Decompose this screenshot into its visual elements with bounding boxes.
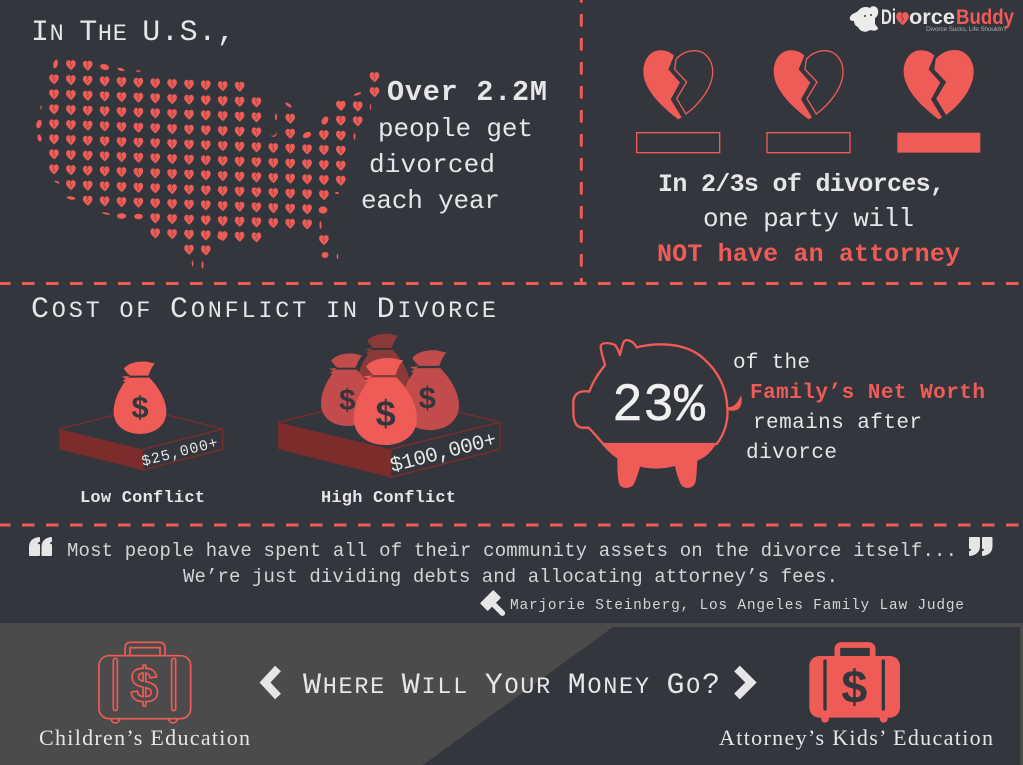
logo: DivorceBuddy [850, 6, 1014, 33]
label: children's education: Children’s Education [39, 725, 250, 750]
stat: 2.2M people divorced each year: Over 2.2M [387, 76, 547, 109]
icon: outlined suitcase [99, 642, 191, 723]
box 1: empty [637, 133, 720, 153]
logo: DivorceBuddy: Divorce Sucks, Life Shouldn't [926, 26, 1006, 33]
heading: Cost of Conflict in Divorce: COST OF CONFLICT IN DIVORCE [31, 293, 496, 327]
heart 3: fully filled [904, 50, 973, 119]
broken hearts and attorney boxes [637, 50, 980, 153]
stat: family's net worth [733, 352, 985, 465]
box 3: filled [897, 133, 980, 153]
quote text [67, 540, 957, 588]
icon: opening quote mark [30, 538, 51, 555]
stat: 2/3 of divorces no attorney [657, 170, 960, 269]
map of the U.S. made of broken hearts [35, 59, 379, 269]
stat: 2.2M people divorced each year [361, 76, 547, 216]
high conflict: four money bags on platform: $ [376, 393, 396, 434]
icon: filled suitcase [809, 645, 900, 723]
piggy bank 23 percent [573, 340, 742, 488]
high conflict: four money bags on platform [278, 334, 500, 479]
quote text: Most people have spent all of their community assets on the divorce itself... [67, 540, 957, 562]
arrow: left chevron [265, 668, 278, 696]
stat: 2.2M people divorced each year: each year [361, 186, 500, 216]
stat: 2/3 of divorces no attorney: one party will [703, 204, 914, 234]
label: attorney's kids' education: Attorney’s Kids’ Education [719, 725, 993, 750]
logo: DivorceBuddy: Di [881, 6, 896, 29]
icon: outlined suitcase: $ [130, 658, 158, 714]
logo: DivorceBuddy: Buddy [956, 6, 1014, 29]
stat: 2/3 of divorces no attorney: In 2/3s of divorces, [658, 170, 945, 199]
quote text: We’re just dividing debts and allocating attorney’s fees. [183, 566, 838, 588]
logo: DivorceBuddy: orce [909, 6, 955, 29]
piggy bank 23 percent: 23% [612, 376, 706, 437]
arrow: right chevron [737, 668, 751, 696]
heart 2: half filled [774, 50, 843, 119]
stat: family's net worth: divorce [746, 442, 837, 465]
stat: 2/3 of divorces no attorney: NOT have an attorney [657, 240, 960, 269]
low conflict: one money bag on platform [59, 361, 223, 471]
label: high conflict: High Conflict [321, 489, 456, 508]
heading: Where Will Your Money Go?: WHERE WILL YOUR MONEY GO? [303, 669, 720, 703]
stat: family's net worth: of the [733, 352, 810, 375]
box 2: empty [767, 133, 850, 153]
heading: In The U.S.: IN THE U.S., [31, 16, 235, 50]
label: low conflict: Low Conflict [80, 489, 205, 508]
heart 1: half filled [643, 50, 713, 119]
icon: gavel [480, 590, 506, 617]
high conflict: four money bags on platform: $ [339, 384, 355, 417]
icon: filled suitcase: $ [841, 661, 867, 713]
low conflict: one money bag on platform: $25,000+ [140, 435, 220, 471]
high conflict: four money bags on platform: $100,000+ [388, 429, 499, 479]
attribution: Marjorie Steinberg, Los Angeles Family Law Judge [510, 598, 964, 614]
stat: family's net worth: remains after [753, 412, 922, 435]
stat: 2.2M people divorced each year: divorced [369, 150, 495, 180]
low conflict: one money bag on platform: $ [131, 390, 149, 424]
stat: family's net worth: Family’s Net Worth [750, 382, 985, 405]
high conflict: four money bags on platform: $ [419, 381, 436, 415]
stat: 2.2M people divorced each year: people get [378, 114, 533, 144]
icon: closing quote mark [970, 538, 992, 555]
panel: bottom question [0, 623, 1023, 765]
